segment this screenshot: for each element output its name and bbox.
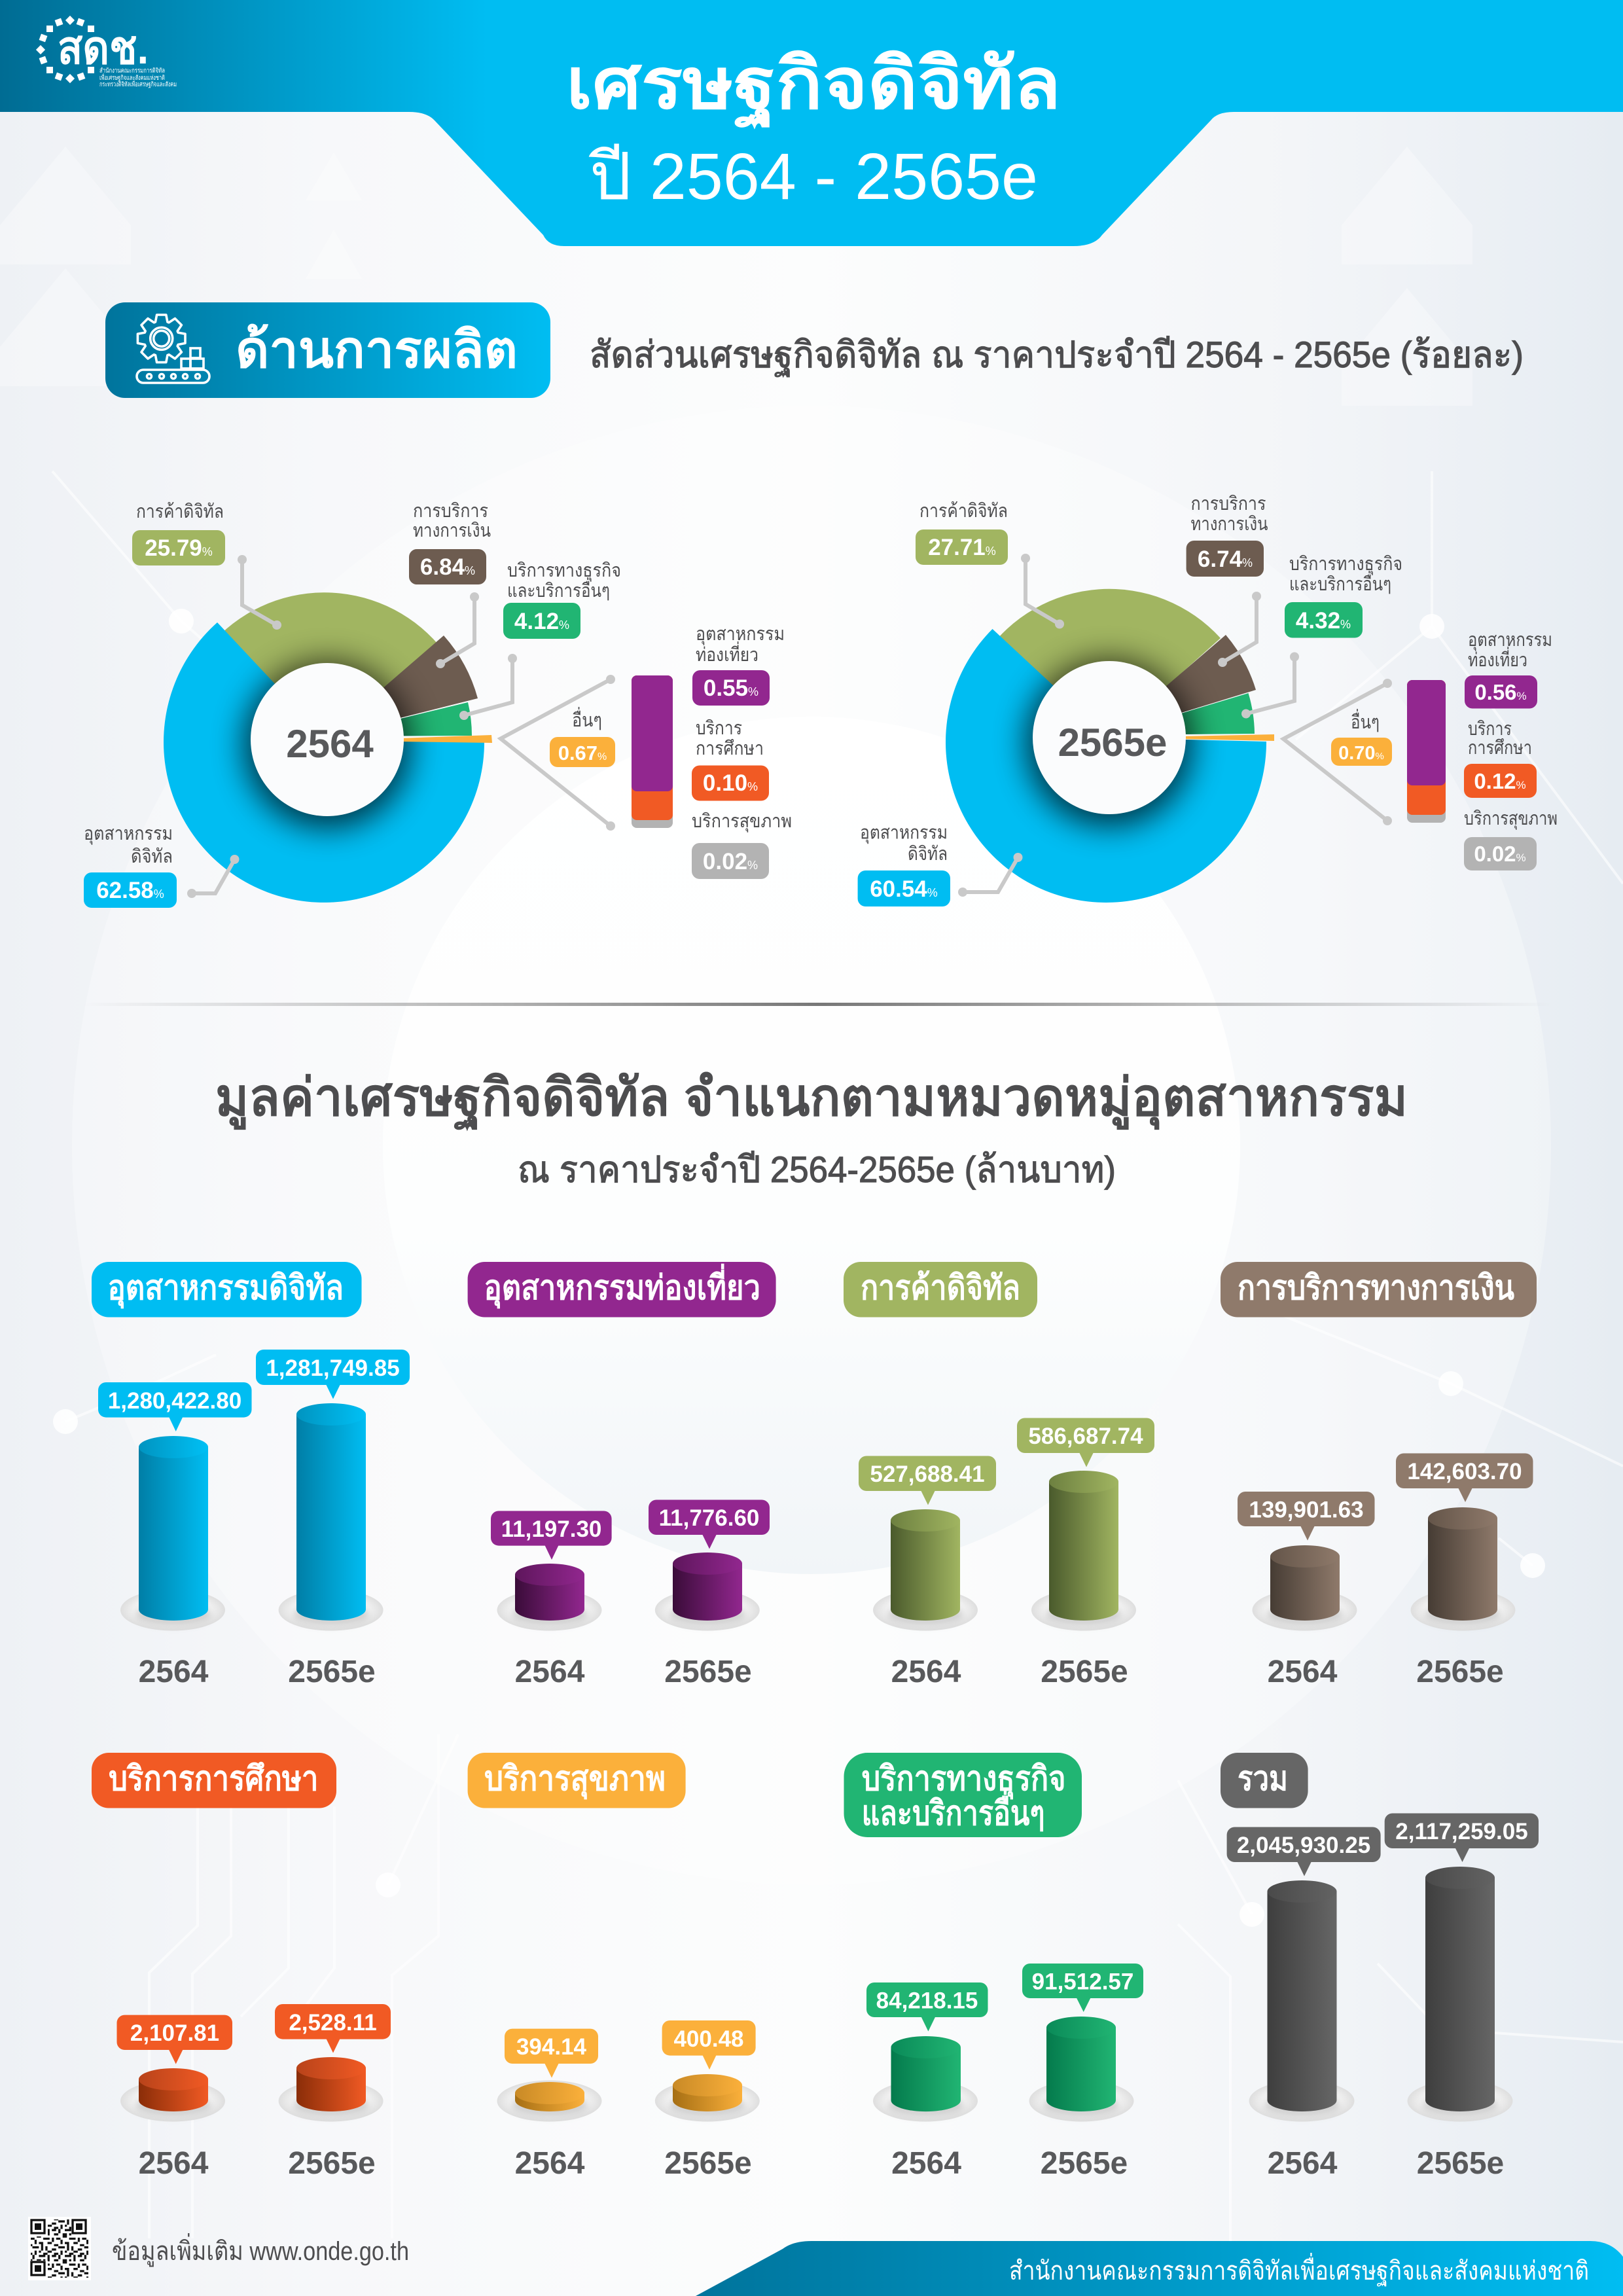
label: tourism: อุตสาหกรรม [696, 624, 785, 645]
value bubble 2565e [275, 2004, 391, 2053]
subtitle: share of digital economy: สัดส่วนเศรษฐกิจดิจิทัล ณ ราคาประจำปี 2564 - 2565e (ร้อยละ) [590, 334, 1524, 376]
value bubble 2565e [1396, 1453, 1533, 1502]
label: business services: บริการทางธุรกิจ [507, 560, 621, 582]
donut chart 2564 [164, 592, 492, 903]
label: tourism: ท่องเที่ยว [696, 641, 758, 666]
value bubble 2564: 527,688.41 [870, 1462, 985, 1487]
category chip [1221, 1753, 1308, 1808]
year labels [1268, 2146, 1504, 2181]
value bubble 2564 [98, 1382, 251, 1431]
year labels: 2564 [515, 2146, 585, 2181]
year labels: 2564 [891, 1655, 961, 1689]
value bubble 2564: 2,107.81 [130, 2020, 219, 2046]
cylinder 2564 [120, 2068, 225, 2122]
logo: กระทรวงดิจิทัลเพื่อเศรษฐกิจและสังคม [99, 79, 177, 88]
label: tourism: ท่องเที่ยว [1468, 647, 1527, 671]
logo: เพื่อเศรษฐกิจและสังคมแห่งชาติ [99, 73, 165, 82]
value bubble 2565e: 11,776.60 [659, 1505, 759, 1531]
value bubble 2564: 1,280,422.80 [108, 1388, 241, 1414]
label: digital industry: อุตสาหกรรม [84, 823, 173, 845]
section tag: production [105, 302, 550, 398]
category chip: บริการทางธุรกิจ [862, 1760, 1066, 1800]
label: education [692, 718, 769, 801]
label: digital commerce: การค้าดิจิทัล [919, 501, 1008, 522]
year labels [139, 1655, 376, 1689]
label: financial services [409, 501, 491, 584]
label: education: 0.12% [1474, 769, 1526, 793]
category chip: และบริการอื่นๆ [862, 1789, 1045, 1833]
label: financial services: การบริการ [1191, 493, 1266, 514]
year labels: 2564 [891, 2146, 961, 2181]
value bubble 2565e [256, 1350, 410, 1399]
label: health: บริการสุขภาพ [692, 811, 792, 833]
QR code [28, 2217, 91, 2280]
value bubble 2565e: 91,512.57 [1032, 1969, 1133, 1995]
value bubble 2564: 84,218.15 [876, 1988, 978, 2013]
value bubble 2564 [1227, 1827, 1381, 1876]
year labels: 2565e [664, 1655, 752, 1689]
label: digital industry: 62.58% [96, 878, 164, 903]
label: digital commerce: การค้าดิจิทัล [136, 501, 224, 522]
heading: value by industry: มูลค่าเศรษฐกิจดิจิทัล จำแนกตามหมวดหมู่อุตสาหกรรม [215, 1068, 1408, 1132]
value bubble 2565e [1017, 1418, 1154, 1467]
cylinder 2564 [497, 1564, 602, 1631]
label: business services: และบริการอื่นๆ [1289, 571, 1391, 595]
category chip: อุตสาหกรรมดิจิทัล [107, 1269, 344, 1309]
label: tourism [1465, 630, 1552, 708]
year labels: 2565e [288, 1655, 376, 1689]
header banner [0, 0, 1623, 246]
value bubble 2565e: 2,528.11 [289, 2010, 377, 2036]
value bubble 2565e: 1,281,749.85 [266, 1355, 400, 1381]
label: education: 0.10% [703, 770, 758, 796]
heading: value by industry: ณ ราคาประจำปี 2564-2565e (ล้านบาท) [518, 1149, 1116, 1190]
label: others [550, 707, 615, 767]
category chip: รวม [1238, 1760, 1288, 1798]
value bubble 2565e: 2,117,259.05 [1395, 1819, 1528, 1844]
cylinder 2565e [1411, 1507, 1516, 1631]
label: digital commerce: 27.71% [928, 535, 996, 560]
label: tourism: 0.55% [704, 675, 758, 701]
value bubble 2565e [649, 1500, 770, 1549]
label: education [1464, 719, 1537, 798]
label: business services: บริการทางธุรกิจ [1289, 554, 1402, 575]
cylinder 2564 [497, 2080, 602, 2122]
label: tourism: อุตสาหกรรม [1468, 630, 1552, 651]
leader lines [963, 558, 1387, 892]
year labels: 2564 [515, 1655, 585, 1689]
year labels [515, 1655, 752, 1689]
leader lines [192, 560, 611, 893]
category chip: อุตสาหกรรมท่องเที่ยว [484, 1264, 760, 1309]
label: digital industry [858, 823, 950, 906]
value bubble 2564 [505, 2029, 598, 2078]
logo [36, 16, 177, 88]
label: health: 0.02% [1474, 842, 1526, 866]
value bubble 2565e: 142,603.70 [1407, 1459, 1522, 1484]
category chip [92, 1262, 361, 1317]
value bubble 2565e: 586,687.74 [1028, 1424, 1143, 1449]
title: เศรษฐกิจดิจิทัล [566, 44, 1061, 130]
year labels: 2565e [1041, 1655, 1128, 1689]
value bubble 2565e: 400.48 [673, 2026, 744, 2052]
donut chart 2565e: 2565e [1058, 721, 1167, 764]
stacked bar: others [1407, 680, 1446, 823]
cylinder 2564 [120, 1436, 225, 1631]
label: business services: 4.12% [514, 609, 569, 634]
year labels: 2564 [1268, 1655, 1338, 1689]
logo: สำนักงานคณะกรรมการดิจิทัล [99, 67, 165, 75]
year labels: 2565e [1416, 1655, 1504, 1689]
category chip [468, 1262, 776, 1317]
cylinder 2565e [655, 1552, 760, 1631]
year labels: 2564 [139, 2146, 209, 2181]
value bubble 2564: 139,901.63 [1249, 1498, 1364, 1522]
title [566, 44, 1061, 213]
panel: health [468, 1753, 760, 2181]
label: digital industry: ดิจิทัล [908, 844, 948, 865]
year labels [891, 2146, 1128, 2181]
year labels [515, 2146, 752, 2181]
label: health [1464, 808, 1558, 870]
cylinder 2565e [1407, 1867, 1513, 2122]
year labels: 2565e [664, 2146, 752, 2181]
year labels: 2565e [288, 2146, 376, 2181]
category chip: การบริการทางการเงิน [1238, 1269, 1514, 1307]
label: education: บริการ [1468, 719, 1512, 740]
value bubble 2564: 11,197.30 [501, 1516, 601, 1542]
category chip [468, 1753, 686, 1808]
label: education: การศึกษา [696, 738, 764, 759]
year labels: 2565e [1417, 2146, 1504, 2181]
label: others: อื่นๆ [572, 707, 602, 731]
label: digital commerce [916, 501, 1008, 565]
donut chart 2565e [946, 589, 1274, 903]
value bubble 2565e [1385, 1813, 1539, 1862]
panel: business services [844, 1753, 1143, 2181]
label: financial services: ทางการเงิน [413, 520, 491, 541]
year labels [891, 1655, 1128, 1689]
category chip [844, 1753, 1082, 1837]
title: ปี 2564 - 2565e [589, 140, 1038, 213]
panel: education [92, 1753, 391, 2181]
donut chart 2564: 2564 [286, 722, 374, 766]
label: business services [503, 560, 621, 639]
panel: donut 2564 [84, 501, 792, 908]
label: business services: และบริการอื่นๆ [507, 577, 610, 601]
label: digital industry: 60.54% [870, 876, 938, 902]
label: others: 0.70% [1338, 743, 1384, 764]
panel: donut 2565e [858, 493, 1558, 906]
tag label: ด้านการผลิต [236, 321, 518, 378]
icon: gear and conveyor [137, 315, 209, 383]
label: digital industry: ดิจิทัล [131, 846, 173, 867]
cylinder 2565e [279, 1403, 383, 1631]
value bubble 2564 [859, 1456, 996, 1505]
heading: value by industry [215, 1068, 1408, 1190]
label: others: อื่นๆ [1351, 709, 1380, 733]
label: health: บริการสุขภาพ [1464, 808, 1558, 830]
footer banner [696, 2241, 1623, 2296]
label: others: 0.67% [558, 742, 607, 764]
label: digital industry: อุตสาหกรรม [860, 823, 948, 844]
cylinder 2564 [1253, 1545, 1357, 1631]
label: education: การศึกษา [1468, 738, 1532, 759]
value bubble 2565e [1022, 1964, 1143, 2012]
value bubble 2564 [116, 2015, 232, 2064]
label: financial services: การบริการ [413, 501, 488, 522]
cylinder 2565e [1029, 2017, 1133, 2122]
label: business services [1285, 554, 1402, 637]
value bubble 2564 [491, 1511, 612, 1560]
label: others [1331, 709, 1392, 766]
category chip [92, 1753, 336, 1808]
cylinder 2564 [1249, 1880, 1355, 2122]
value bubble 2564 [1238, 1492, 1374, 1541]
panel: financial services [1221, 1262, 1537, 1689]
more information text: ข้อมูลเพิ่มเติม www.onde.go.th [112, 2233, 409, 2267]
label: digital commerce: 25.79% [145, 535, 213, 561]
panel: tourism [468, 1262, 776, 1689]
label: digital commerce [132, 501, 225, 565]
label: tourism: 0.56% [1474, 680, 1527, 704]
panel: digital commerce [844, 1262, 1154, 1689]
label: health [692, 811, 792, 879]
cylinder 2565e [1031, 1471, 1136, 1631]
category chip: บริการการศึกษา [109, 1760, 318, 1798]
label: financial services [1186, 493, 1268, 577]
label: digital industry [84, 823, 177, 908]
stacked bar: others [632, 675, 673, 828]
label: financial services: ทางการเงิน [1191, 514, 1268, 535]
category chip: บริการสุขภาพ [484, 1760, 666, 1800]
label: tourism [692, 624, 785, 706]
value bubble 2564 [866, 1982, 988, 2032]
label: health: 0.02% [703, 849, 758, 874]
panel: digital industry [92, 1262, 410, 1689]
category chip [844, 1262, 1037, 1317]
cylinder 2564 [873, 1509, 978, 1631]
value bubble 2564: 2,045,930.25 [1237, 1833, 1370, 1858]
cylinder 2565e [279, 2057, 383, 2122]
year labels: 2564 [1268, 2146, 1338, 2181]
category chip: การค้าดิจิทัล [861, 1269, 1020, 1307]
label: education: บริการ [696, 718, 742, 739]
value bubble 2565e [662, 2020, 756, 2070]
category chip [1221, 1262, 1537, 1317]
year labels [139, 2146, 376, 2181]
panel: total [1221, 1753, 1539, 2181]
year labels: 2565e [1041, 2146, 1128, 2181]
cylinder 2565e [655, 2074, 760, 2122]
label: financial services: 6.84% [420, 554, 475, 580]
year labels [1268, 1655, 1504, 1689]
value bubble 2564: 394.14 [516, 2034, 587, 2060]
label: business services: 4.32% [1296, 608, 1351, 634]
logo: สดช. [58, 22, 149, 73]
cylinder 2564 [873, 2036, 978, 2122]
label: financial services: 6.74% [1198, 547, 1253, 572]
year labels: 2564 [139, 1655, 209, 1689]
